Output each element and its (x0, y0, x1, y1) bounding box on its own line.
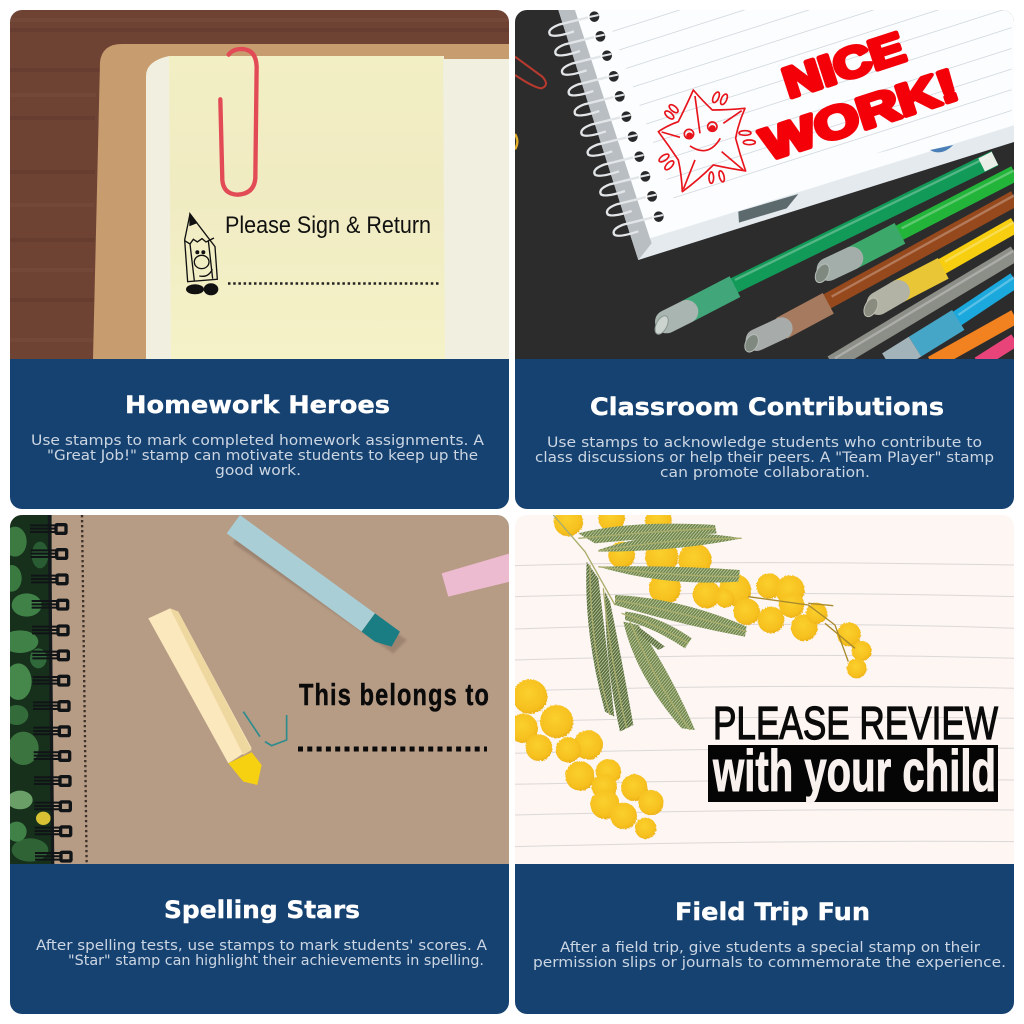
stamp dotted signature line (228, 282, 440, 285)
description: After spelling tests, use stamps to mark students' scores. A (36, 938, 487, 954)
heading: Classroom Contributions (590, 393, 944, 421)
description: Use stamps to mark completed homework assignments. A (31, 433, 484, 449)
description: "Star" stamp can highlight their achievements in spelling. (68, 953, 484, 969)
stamp dotted line (298, 746, 487, 752)
description: permission slips or journals to commemorate the experience. (533, 955, 1006, 971)
icon: smiling star stamp (658, 90, 755, 192)
red paperclip on desk (515, 57, 546, 88)
yellow paperclip on desk (515, 134, 517, 149)
mimosa flowers: top sprig (554, 505, 872, 678)
panel: Spelling Stars (2, 515, 510, 1014)
description: "Great Job!" stamp can motivate students to keep up the (47, 448, 478, 464)
spiral rings (549, 9, 664, 236)
stamp text: This belongs to: This belongs to (299, 677, 490, 712)
foliage (10, 515, 52, 864)
description: After a field trip, give students a special stamp on their (560, 940, 980, 956)
chalk: blue with teal tip (227, 515, 407, 653)
description (36, 938, 487, 969)
frond stems (553, 515, 747, 730)
description: can promote collaboration. (660, 465, 870, 481)
chalk: cream with yellow tip (148, 608, 262, 785)
panel: Field Trip Fun (509, 505, 1015, 1014)
caption band (10, 359, 509, 509)
spine (49, 515, 53, 865)
description (31, 433, 484, 479)
description: class discussions or help their peers. A "Team Player" stamp (535, 450, 994, 466)
photo: spiral notebook with Nice Work stamp and markers (515, 0, 1015, 363)
stamp text: NICE WORK! (755, 30, 958, 160)
photo: mimosa sprigs on lined paper with Please Review stamp (509, 505, 1015, 865)
heading: Field Trip Fun (675, 898, 870, 926)
stamp text: NICE WORK!: NICE (777, 24, 911, 108)
description (533, 940, 1006, 971)
photo: note clipped to a notebook with Please Sign and Return stamp (10, 10, 510, 360)
panel: Homework Heroes (10, 10, 510, 509)
notebook (549, 0, 1015, 269)
caption band (515, 864, 1014, 1014)
binding coils (30, 525, 71, 861)
icon: red paperclip (220, 49, 257, 195)
panel: Classroom Contributions (515, 0, 1015, 509)
description: good work. (215, 463, 301, 479)
icon: pencil character (185, 214, 218, 295)
description (535, 435, 994, 481)
chalk: pink (442, 553, 510, 597)
caption band (10, 864, 509, 1014)
heading: Homework Heroes (125, 391, 390, 419)
markers (652, 157, 1015, 363)
mimosa flowers: bottom sprig (509, 679, 664, 839)
photo: kraft notebook with chalk and This belongs to stamp (2, 515, 510, 865)
stamp text: NICE WORK!: WORK! (755, 59, 964, 170)
heading: Spelling Stars (164, 896, 360, 924)
description: Use stamps to acknowledge students who contribute to (547, 435, 982, 451)
mimosa fronds (578, 524, 747, 732)
caption band (515, 359, 1014, 509)
stamp text: Please Sign & Return: Please Sign & Return (225, 212, 431, 239)
chalk scribble (243, 712, 287, 746)
